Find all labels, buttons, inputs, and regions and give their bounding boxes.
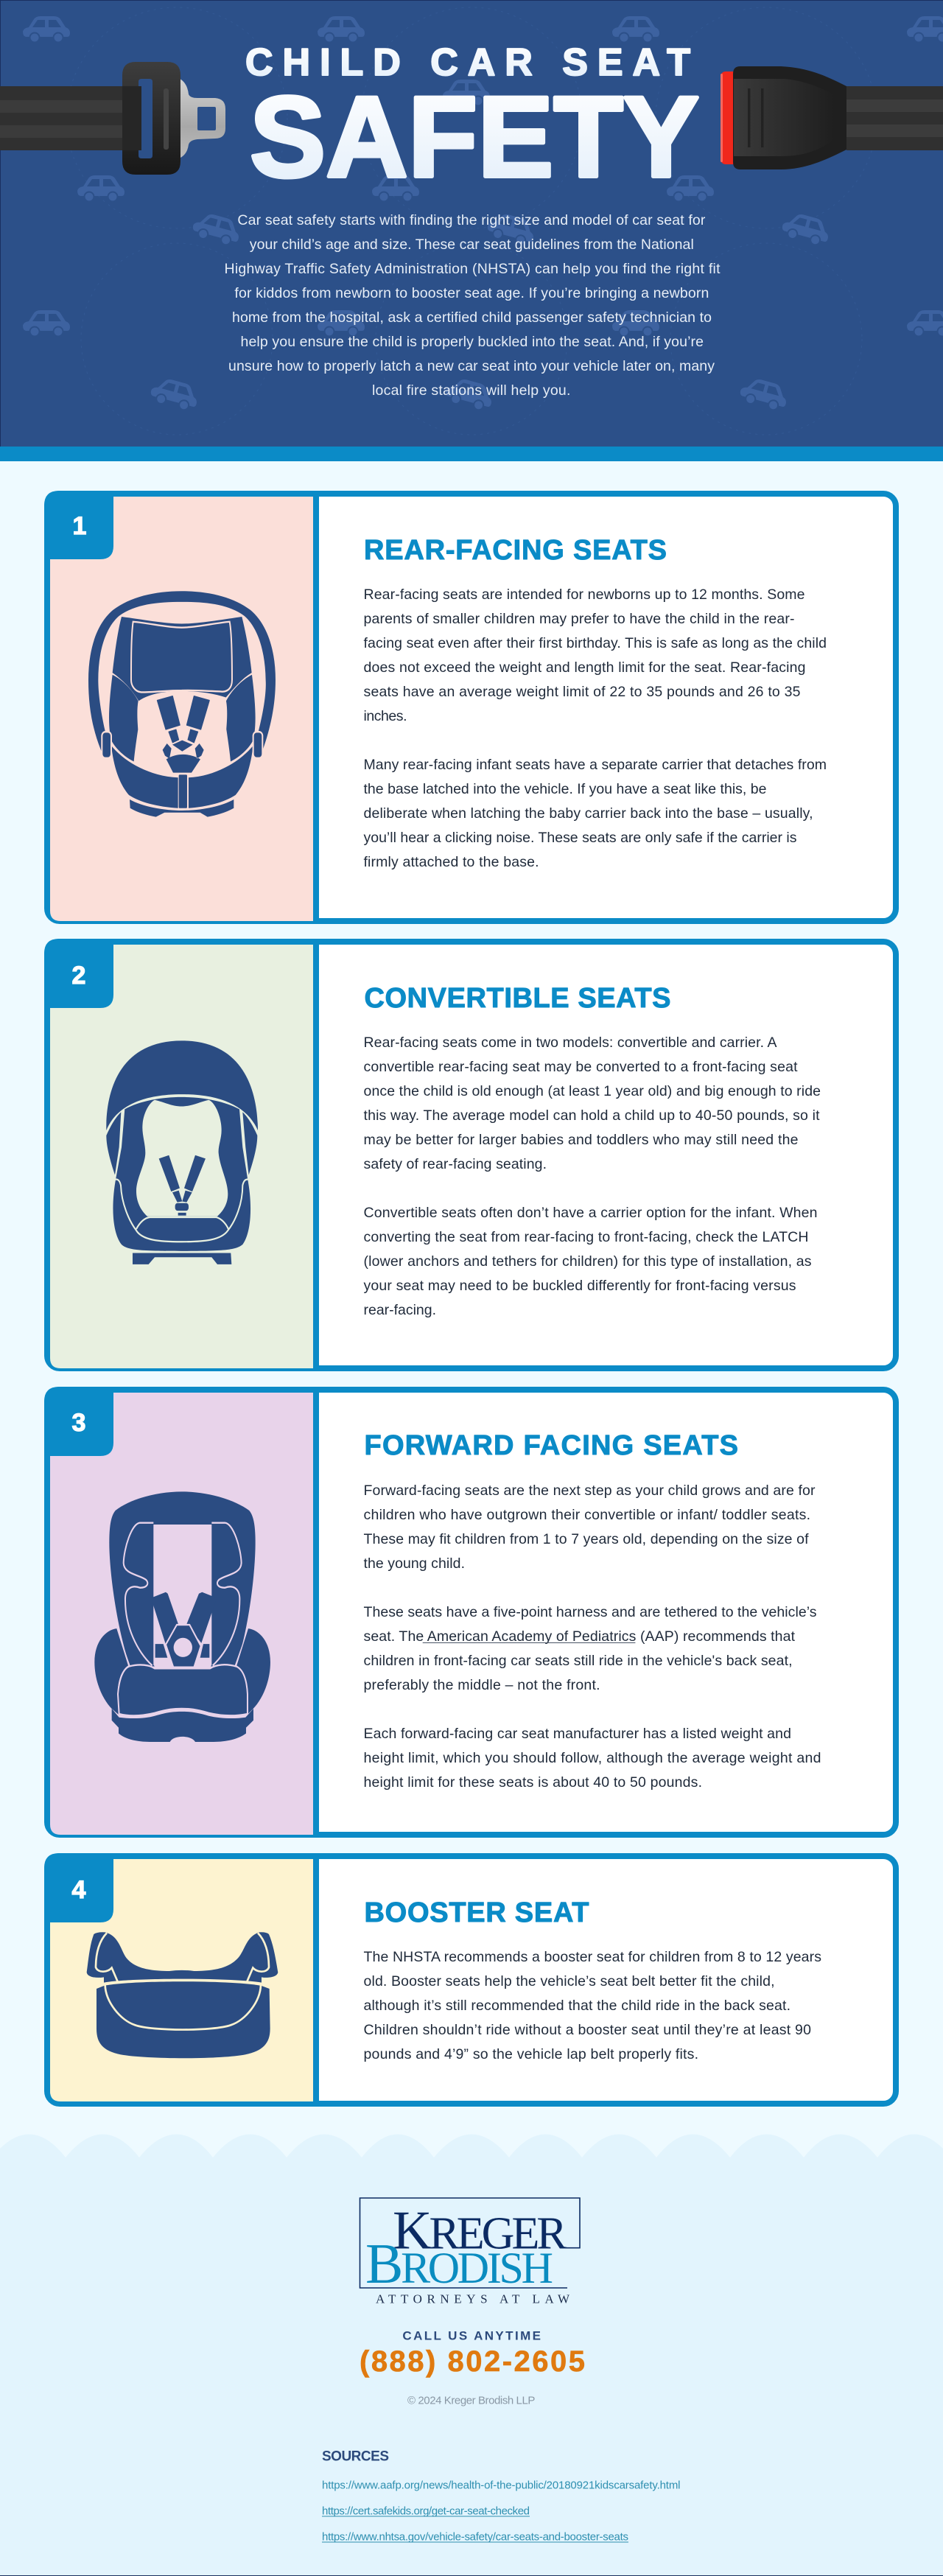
text: convertible description: may be better for larger babies and toddlers who may still need the [364,1132,799,1148]
text: rear-facing description: does not exceed the weight and length limit for the seat. Rear-facing [364,659,806,676]
text: forward facing description: Each forward-facing car seat manufacturer has a listed weight and [364,1726,791,1742]
heading: rear-facing seats: REAR-FACING SEATS [364,535,667,566]
intro text: help you ensure the child is properly buckled into the seat. And, if you’re [240,334,704,350]
panel: rear-facing seats [44,491,896,921]
text: rear-facing description: inches. [364,708,407,724]
text: booster description: although it’s still recommended that the child ride in the back seat. [364,1998,790,2014]
icon: seat belt buckle, right [721,66,943,169]
text: booster description: old. Booster seats help the vehicle’s seat belt better fit the child, [364,1973,775,1989]
text: convertible description: Convertible seats often don’t have a carrier option for the infant. When [364,1205,818,1221]
text: rear-facing description: deliberate when latching the baby carrier back into the base – usually, [364,805,813,822]
text: forward facing description: children in front-facing car seats still ride in the vehicle's back seat, [364,1653,793,1669]
icon: convertible seat [106,1040,258,1264]
text: forward facing description: height limit for these seats is about 40 to 50 pounds. [364,1774,702,1791]
panel: forward facing seats [44,1387,896,1835]
panel: header [0,0,943,461]
text: forward facing description: children who have outgrown their convertible or infant/ toddler seats. [364,1507,810,1523]
text: forward facing description: preferably the middle – not the front. [364,1677,600,1693]
source links: https://www.aafp.org/news/health-of-the-public/20180921kidscarsafety.html [322,2479,681,2492]
text: forward facing description: Forward-facing seats are the next step as your child grows and are for [364,1483,816,1499]
intro text: Highway Traffic Safety Administration (NHSTA) can help you find the right fit [224,261,721,277]
text: forward facing description [364,1483,821,1791]
number badge 1: 1 [73,512,86,540]
source links [322,2479,681,2544]
intro text: local fire stations will help you. [372,382,570,399]
text: forward facing description: seat. The American Academy of Pediatrics (AAP) recommends that [364,1628,796,1645]
intro text: your child’s age and size. These car seat guidelines from the National [250,237,694,253]
logo: Kreger Brodish: ATTORNEYS AT LAW [376,2292,570,2306]
number badge 4 [44,1853,113,1922]
text: forward facing description: These seats have a five-point harness and are tethered to the vehicle’s [364,1604,817,1620]
intro text: home from the hospital, ask a certified child passenger safety technician to [232,309,712,326]
source links: https://www.nhtsa.gov/vehicle-safety/car-seats-and-booster-seats [322,2530,628,2544]
text: forward facing description: the young child. [364,1555,465,1572]
heading: booster seat: BOOSTER SEAT [364,1897,589,1928]
text: convertible description: once the child is old enough (at least 1 year old) and big enough to ride [364,1083,821,1099]
title [245,41,699,202]
logo: Kreger Brodish: KREGER [393,2200,567,2261]
text: forward facing description: height limit, which you should follow, although the average weight and [364,1750,821,1766]
text: booster description [364,1949,821,2062]
text: rear-facing description: seats have an average weight limit of 22 to 35 pounds and 26 to 35 [364,684,801,700]
number badge 3: 3 [72,1409,85,1437]
number badge 3 [44,1387,113,1456]
text: rear-facing description: Rear-facing seats are intended for newborns up to 12 months. Some [364,587,804,603]
icon: booster seat [87,1932,278,2058]
number badge 2 [44,939,113,1008]
text: convertible description: (lower anchors and tethers for children) for this type of installation, as [364,1253,812,1270]
copyright: © 2024 Kreger Brodish LLP [407,2395,535,2407]
text: convertible description: this way. The average model can hold a child up to 40-50 pounds, so it [364,1107,820,1124]
logo: Kreger Brodish: BRODISH [365,2232,553,2295]
call us label: CALL US ANYTIME [402,2328,541,2343]
title line: Child Car Seat: CHILD CAR SEAT [245,41,690,84]
text: convertible description: converting the seat from rear-facing to front-facing, check the LATCH [364,1229,809,1245]
text: rear-facing description: parents of smaller children may prefer to have the child in the rear- [364,611,794,627]
logo: Kreger Brodish [360,2198,580,2306]
intro text [224,212,721,399]
text: convertible description: convertible rear-facing seat may be converted to a front-facing seat [364,1059,798,1075]
text: rear-facing description: facing seat even after their first birthday. This is safe as long as the child [364,635,827,651]
text: convertible description: rear-facing. [364,1302,436,1318]
header accent bar [0,447,943,461]
title line: Safety: SAFETY [250,74,699,202]
text: rear-facing description [364,587,827,870]
text: forward facing description: These may fit children from 1 to 7 years old, depending on the size of [364,1531,809,1547]
source links: https://cert.safekids.org/get-car-seat-checked [322,2505,530,2517]
text: convertible description: Rear-facing seats come in two models: convertible and carrier. A [364,1035,777,1051]
heading: convertible seats: CONVERTIBLE SEATS [364,983,670,1014]
panel: convertible seats [44,939,896,1368]
text: rear-facing description: you’ll hear a clicking noise. These seats are only safe if the carrier is [364,830,797,846]
text: booster description: pounds and 4’9” so the vehicle lap belt properly fits. [364,2046,698,2062]
phone number: (888) 802-2605 [360,2345,585,2378]
heading: forward facing seats: FORWARD FACING SEATS [364,1430,738,1461]
number badge 4: 4 [72,1876,86,1904]
text: convertible description [364,1035,821,1318]
panel: booster seat [44,1853,896,2104]
icon: forward facing seat [94,1491,270,1742]
number badge 1 [44,491,113,559]
text: rear-facing description: firmly attached to the base. [364,854,539,870]
text: convertible description: your seat may need to be buckled differently for front-facing versus [364,1278,796,1294]
car pattern background [23,7,943,435]
text: convertible description: safety of rear-facing seating. [364,1156,547,1172]
text: rear-facing description: the base latched into the vehicle. If you have a seat like this, be [364,781,766,797]
panel: footer [0,2134,943,2576]
number badge 2: 2 [72,962,85,990]
icon: seat belt tongue, left [0,62,225,175]
sources heading: SOURCES [322,2449,389,2464]
text: booster description: The NHSTA recommends a booster seat for children from 8 to 12 years [364,1949,821,1965]
intro text: Car seat safety starts with finding the right size and model of car seat for [237,212,706,228]
text: rear-facing description: Many rear-facing infant seats have a separate carrier that detaches from [364,757,827,773]
icon: infant carrier seat [88,591,276,817]
text: booster description: Children shouldn’t ride without a booster seat until they’re at least 90 [364,2022,811,2038]
intro text: for kiddos from newborn to booster seat age. If you’re bringing a newborn [234,285,709,301]
intro text: unsure how to properly latch a new car seat into your vehicle later on, many [228,358,715,374]
